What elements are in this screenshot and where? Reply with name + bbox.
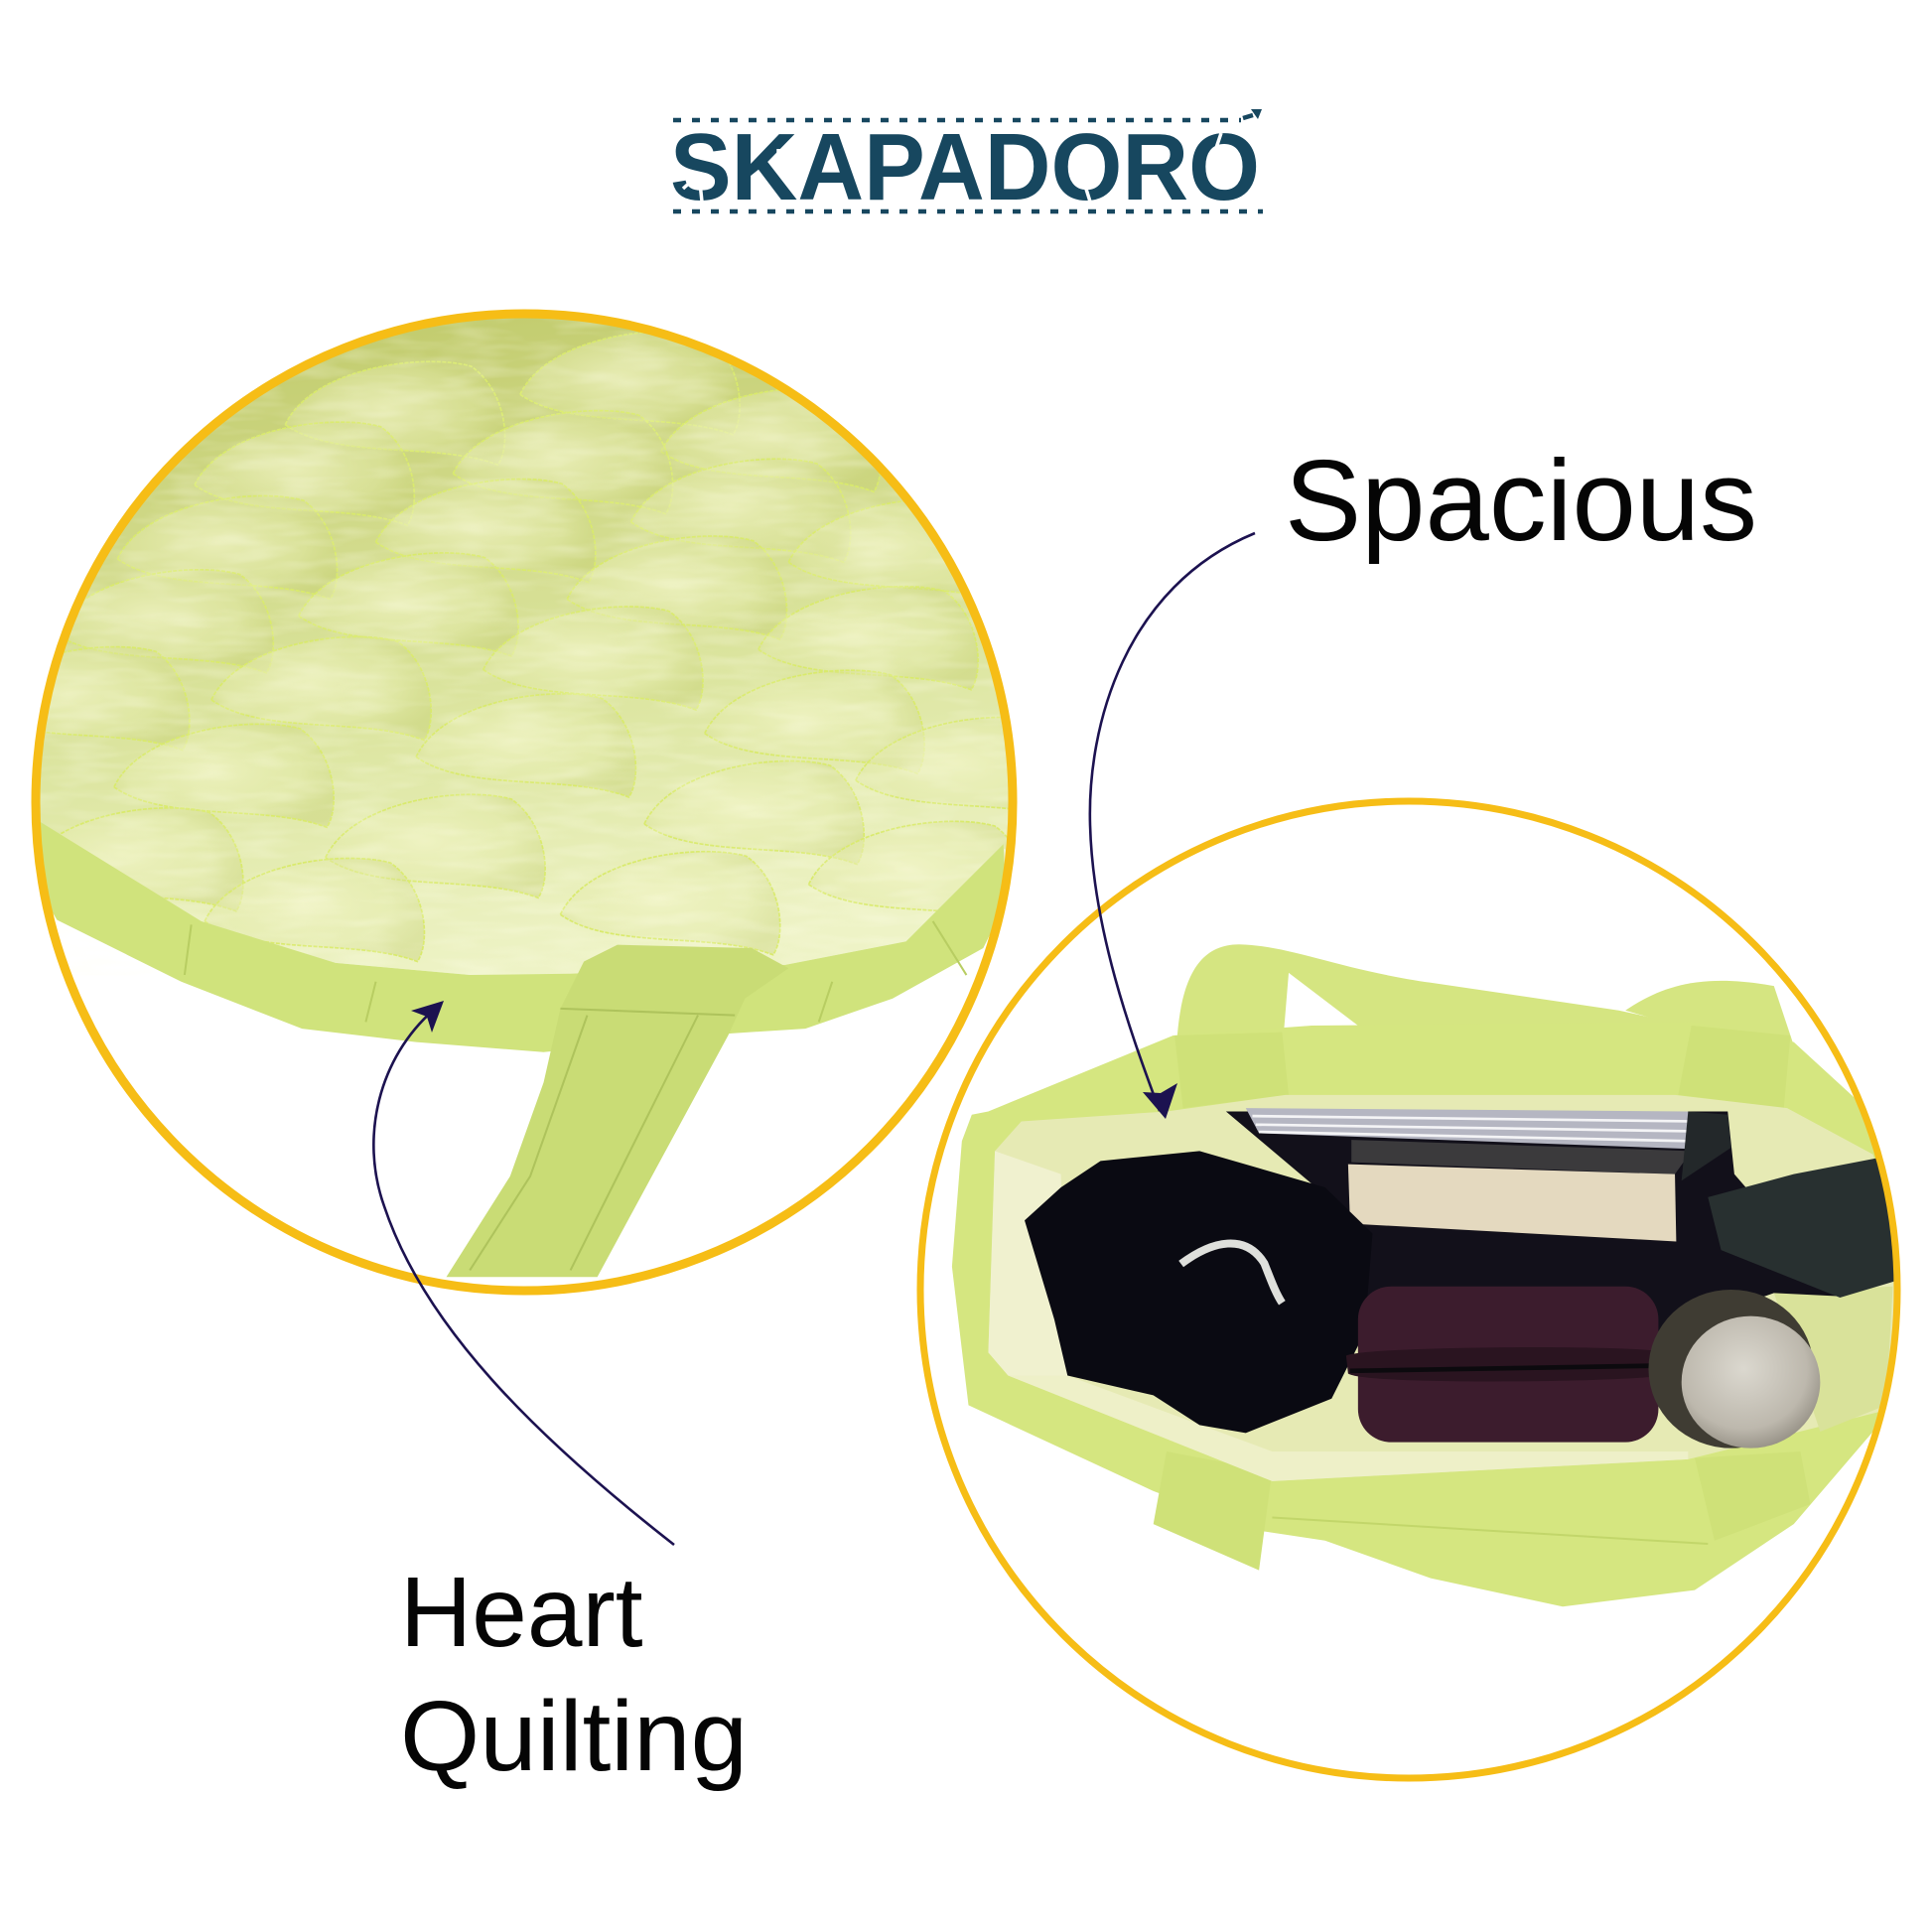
book (1348, 1165, 1676, 1241)
arrowhead: Spacious (1143, 1083, 1177, 1119)
garment cord (1181, 1243, 1282, 1303)
strap (447, 945, 788, 1277)
logo: Skapadoro: SKAPADORO (670, 114, 1260, 220)
black garment (1025, 1151, 1372, 1433)
arrow: Spacious (1090, 533, 1255, 1111)
bag interior (988, 1095, 1912, 1481)
purple case (1346, 1287, 1665, 1443)
label: Heart Quilting (400, 1557, 748, 1792)
dark pouch (1708, 1158, 1912, 1298)
label: Heart Quilting: Heart (400, 1557, 643, 1668)
panel: spacious bag interior (920, 801, 1912, 1778)
rim stitching (1272, 1517, 1708, 1544)
magazines (1246, 1108, 1731, 1180)
label: Heart Quilting: Quilting (400, 1681, 748, 1792)
arrow: Heart Quilting (373, 1010, 674, 1545)
steel bottle (1648, 1290, 1820, 1449)
panel: heart quilting close-up (0, 297, 1075, 1291)
bag body (952, 1023, 1912, 1606)
arrowhead: Heart Quilting (411, 1001, 444, 1033)
front and rear handle tabs (1154, 1026, 1810, 1571)
back handles (1176, 944, 1794, 1048)
dark contents (1226, 1111, 1840, 1332)
lime rim (34, 822, 1007, 1052)
fabric interior (40, 318, 1009, 975)
label: Spacious: Spacious (1285, 436, 1757, 565)
